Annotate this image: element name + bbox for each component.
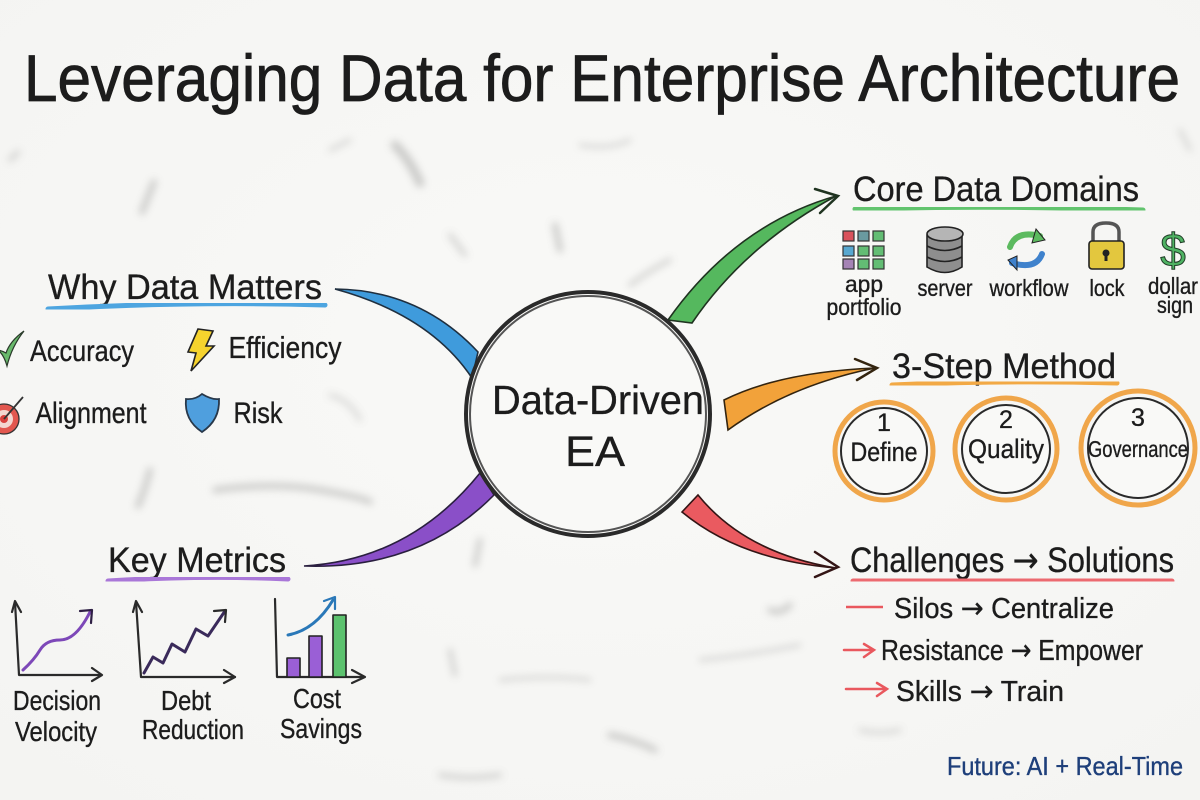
row: silos to centralize: Silos → Centralize xyxy=(894,591,1114,625)
central circle xyxy=(466,292,710,536)
label: debt reduction: Reduction xyxy=(142,714,244,745)
central label: EA xyxy=(565,428,625,476)
step 2: quality: Quality xyxy=(968,434,1044,464)
step 3: governance xyxy=(1081,391,1195,505)
panel: 3-step method xyxy=(835,347,1195,505)
row: skills to train: Skills → Train xyxy=(896,674,1064,708)
label: dollar sign xyxy=(1148,273,1198,318)
icon: lock xyxy=(1089,223,1124,269)
heading: key metrics: Key Metrics xyxy=(108,541,286,580)
connector: 3-step method (orange) xyxy=(724,359,877,430)
icon: shield xyxy=(186,394,219,432)
label: debt reduction: Debt xyxy=(161,685,211,716)
label: efficiency: Efficiency xyxy=(228,330,342,365)
central label xyxy=(492,377,704,476)
label: cost savings: Savings xyxy=(280,713,362,744)
label: cost savings: Cost xyxy=(293,683,341,714)
chart: decision velocity xyxy=(12,601,102,681)
icon: server xyxy=(927,227,963,272)
label: accuracy: Accuracy xyxy=(30,335,134,368)
label: debt reduction xyxy=(142,685,244,745)
heading: core data domains: Core Data Domains xyxy=(853,170,1139,209)
step 2: quality xyxy=(955,398,1057,500)
label: dollar sign: sign xyxy=(1157,292,1193,318)
heading: 3-step method: 3-Step Method xyxy=(892,347,1116,386)
icon: target xyxy=(0,397,23,434)
label: decision velocity: Decision xyxy=(13,685,101,716)
label: alignment: Alignment xyxy=(36,397,147,430)
connector: key metrics (purple) xyxy=(304,473,494,566)
panel: key metrics xyxy=(12,541,365,747)
step 1: define xyxy=(835,402,933,500)
icon: lightning bolt xyxy=(188,329,214,371)
label: decision velocity: Velocity xyxy=(15,716,97,747)
label: lock: lock xyxy=(1090,275,1125,301)
label: server: server xyxy=(918,275,973,301)
step 2: quality: 2 xyxy=(999,406,1013,434)
icon: app portfolio grid xyxy=(843,231,884,269)
row: resistance to empower: Resistance → Empower xyxy=(881,633,1143,667)
connector: core data domains (green) xyxy=(668,189,838,323)
label: decision velocity xyxy=(13,685,101,747)
connector: why data matters (blue) xyxy=(335,289,478,378)
step 3: governance: 3 xyxy=(1131,404,1145,432)
label: app portfolio: portfolio xyxy=(826,294,902,320)
step 1: define: Define xyxy=(850,437,918,467)
chart: debt reduction xyxy=(133,601,235,683)
central label: Data-Driven xyxy=(492,377,704,423)
label: app portfolio xyxy=(826,271,902,320)
label: workflow: workflow xyxy=(989,275,1069,301)
panel: challenges and solutions xyxy=(844,541,1174,708)
heading: challenges to solutions: Challenges → Solutions xyxy=(850,541,1174,581)
icon: workflow arrows xyxy=(1008,229,1045,270)
panel: why data matters xyxy=(0,268,342,434)
panel: core data domains xyxy=(826,170,1198,320)
chart: cost savings xyxy=(275,597,365,683)
icon: dollar sign: $ xyxy=(1160,224,1186,276)
step 1: define: 1 xyxy=(877,409,891,437)
label: app portfolio: app xyxy=(845,271,883,297)
icon: check xyxy=(0,331,24,366)
heading: why data matters: Why Data Matters xyxy=(48,268,322,307)
label: risk: Risk xyxy=(234,397,283,430)
connector: challenges (red) xyxy=(682,495,838,577)
label: cost savings xyxy=(280,683,362,744)
